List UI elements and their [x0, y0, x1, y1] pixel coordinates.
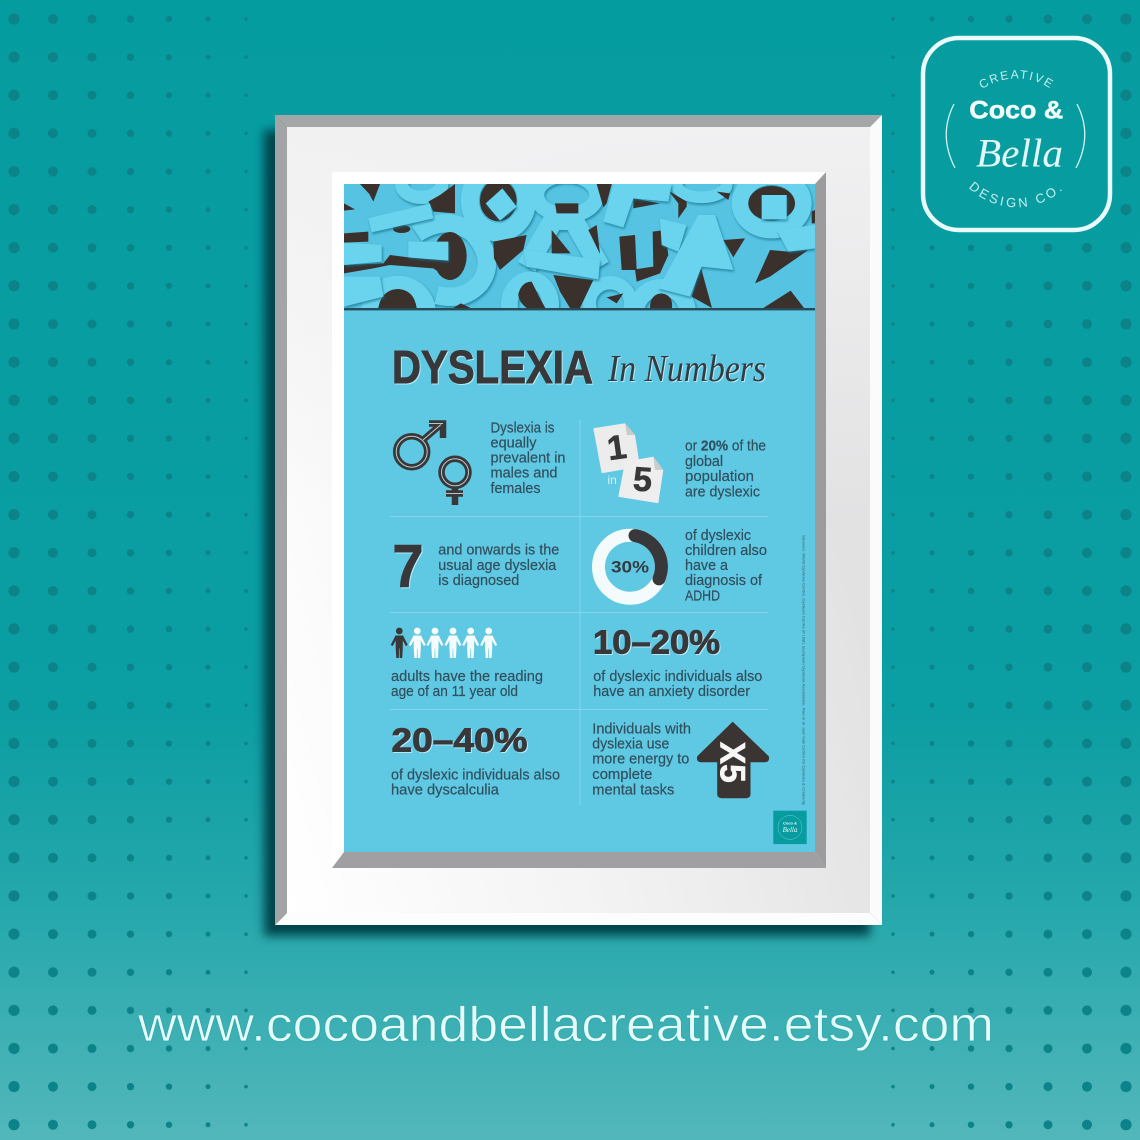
text: mental energy: complete — [592, 767, 652, 783]
text: dyscalculia — [391, 767, 560, 798]
header bottom rule — [344, 308, 815, 310]
text: age of diagnosis: usual age dyslexia — [438, 558, 557, 574]
icon: 1 in 5 paper notes: 5 — [632, 460, 653, 500]
statistic: 20-40%: 20–40% — [392, 721, 528, 758]
small logo: Coco & — [783, 820, 797, 826]
dot pattern: right — [874, 0, 1140, 1140]
text: reading age: age of an 11 year old — [391, 684, 518, 700]
text: 20 percent of population: global — [685, 454, 723, 470]
text: 20 percent of population: or 20% of the — [685, 439, 766, 455]
text: reading age — [391, 669, 543, 700]
text: reading age: adults have the reading — [391, 669, 543, 685]
frame shadow — [264, 130, 870, 936]
text: ADHD: children also — [685, 543, 767, 559]
text: mental energy: Individuals with — [592, 721, 691, 737]
text: 20 percent of population — [685, 439, 766, 501]
header image: paper letters — [344, 184, 815, 308]
poster panel — [344, 169, 815, 852]
logo: Coco and Bella: DESIGN CO. — [969, 182, 1062, 208]
text: anxiety: of dyslexic individuals also — [593, 669, 762, 685]
picture frame — [275, 115, 882, 925]
text: age of diagnosis — [438, 543, 559, 589]
dot pattern: left — [0, 0, 265, 1140]
text: mental energy: mental tasks — [592, 782, 674, 798]
sources note: Sources: World Dyslexia Centre, Dyslexia Centre of Utah, European Dyslexia Association, Rao et al. and Yale Centre for Dyslexia & Creativity — [802, 535, 806, 805]
arrow: x5: X5 — [712, 742, 752, 783]
text: 20 percent of population: are dyslexic — [685, 485, 760, 501]
donut chart: 30 percent — [598, 535, 662, 598]
text: age of diagnosis: and onwards is the — [438, 543, 559, 559]
text: equally prevalent — [490, 421, 566, 497]
text: dyscalculia: have dyscalculia — [391, 782, 500, 798]
text: anxiety — [593, 669, 762, 700]
title: In Numbers — [607, 348, 766, 390]
donut chart: 30 percent: 30% — [611, 558, 649, 577]
dividers — [390, 420, 768, 805]
text: age of diagnosis: is diagnosed — [438, 573, 519, 589]
icon: 1 in 5 paper notes: in — [608, 473, 617, 487]
text: ADHD: have a — [685, 558, 729, 574]
text: ADHD — [685, 528, 767, 605]
text: equally prevalent: equally — [490, 436, 537, 452]
text: equally prevalent: females — [490, 481, 540, 497]
text: mental energy — [592, 721, 691, 798]
arrow: x5 — [697, 722, 769, 798]
text: equally prevalent: prevalent in — [490, 451, 566, 467]
text: equally prevalent: Dyslexia is — [490, 421, 554, 437]
icon: 1 in 5 paper notes — [593, 423, 663, 503]
text: 20 percent of population: population — [685, 469, 754, 485]
logo: Coco and Bella: Coco & — [969, 96, 1063, 124]
text: ADHD: diagnosis of — [685, 573, 763, 589]
website url: www.cocoandbellacreative.etsy.com — [137, 998, 994, 1052]
small logo: Bella — [783, 826, 798, 834]
text: mental energy: more energy to — [592, 752, 689, 768]
text: ADHD: ADHD — [685, 589, 720, 605]
text: anxiety: have an anxiety disorder — [593, 684, 750, 700]
title: DYSLEXIA — [392, 341, 593, 393]
icon: six people, one highlighted — [391, 628, 497, 658]
icon: 1 in 5 paper notes: 1 — [605, 428, 629, 468]
logo: Coco and Bella: Bella — [976, 131, 1063, 176]
title — [392, 341, 766, 393]
statistic: 10-20%: 10–20% — [593, 623, 720, 660]
small logo — [773, 811, 807, 844]
statistic: 7: 7 — [392, 533, 424, 600]
logo: Coco and Bella: CREATIVE — [980, 70, 1054, 88]
text: equally prevalent: males and — [490, 466, 558, 482]
text: mental energy: dyslexia use — [592, 736, 669, 752]
text: dyscalculia: of dyslexic individuals also — [391, 767, 560, 783]
text: ADHD: of dyslexic — [685, 528, 751, 544]
logo: Coco and Bella — [920, 36, 1112, 232]
icon: male and female symbols — [396, 424, 468, 505]
